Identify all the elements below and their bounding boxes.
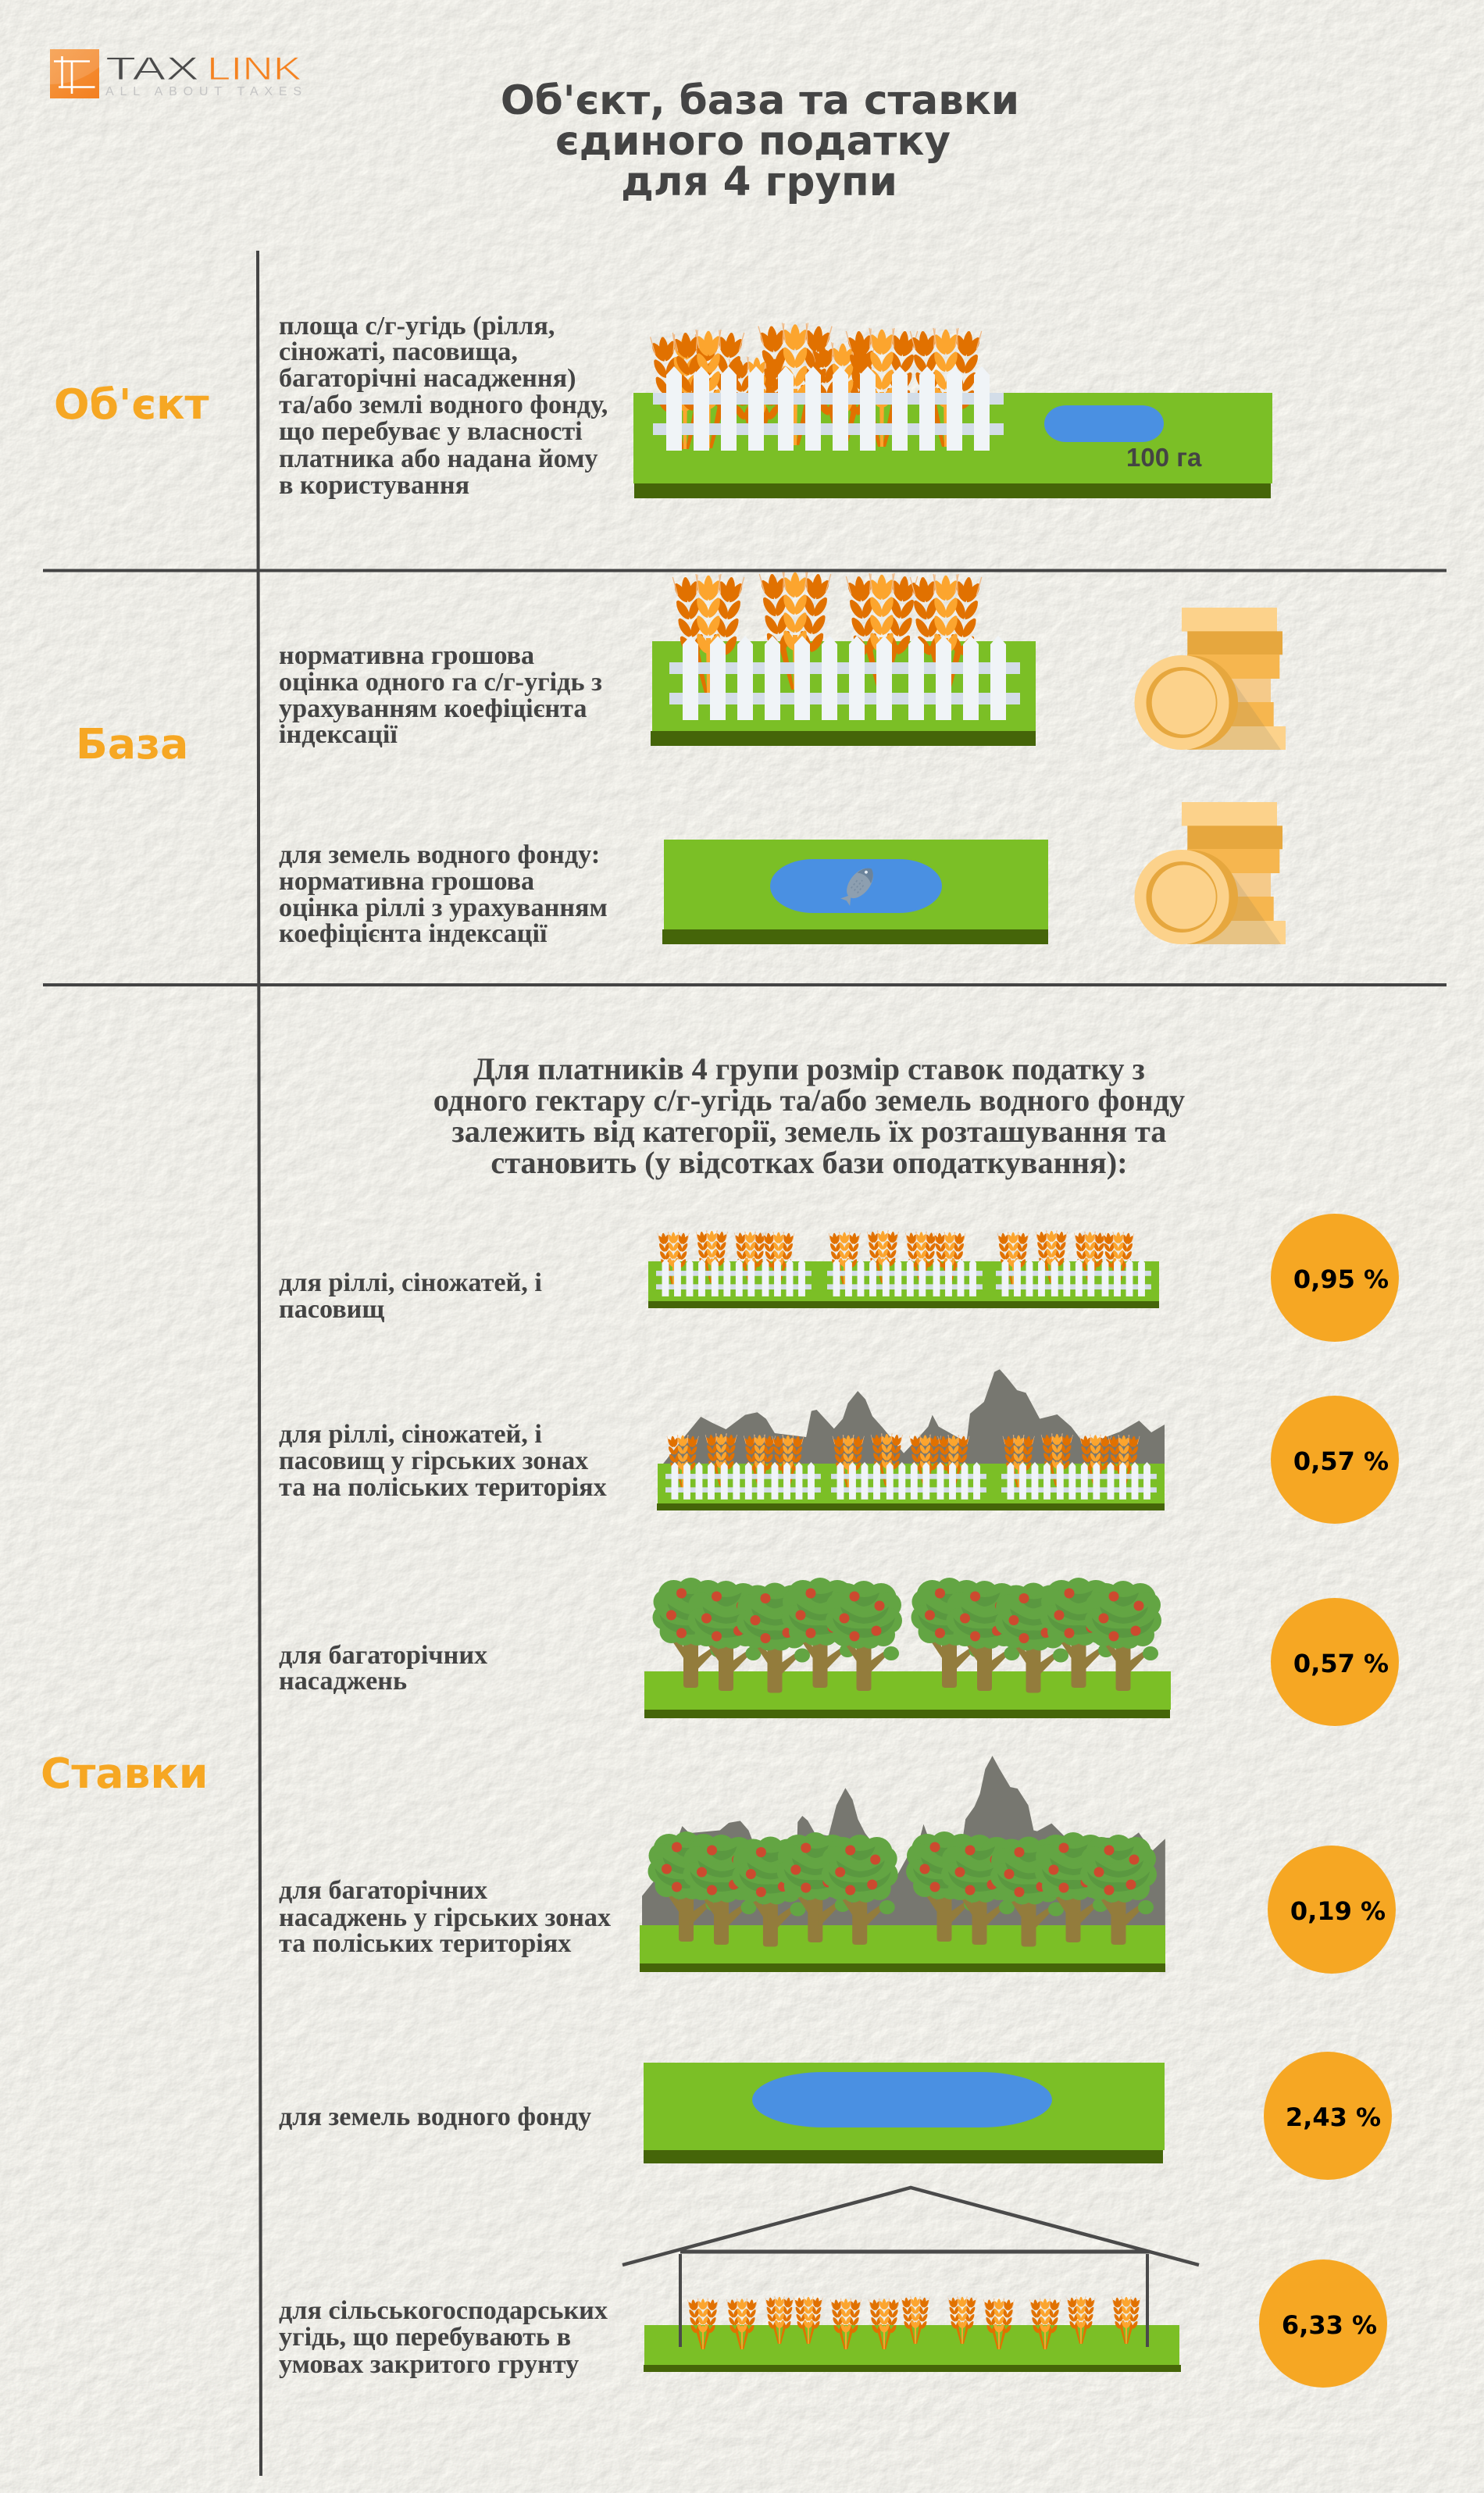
text: base description: індексації — [279, 720, 398, 749]
text: object description: в користування — [279, 471, 469, 500]
illustration: apple orchard — [644, 1578, 1171, 1718]
illustration: fenced wheat field — [651, 571, 1036, 746]
text: water fund base description: нормативна грошова — [279, 867, 534, 896]
rate badge 0,19 %: 0,19 % — [1290, 1896, 1386, 1926]
text: water fund base description: для земель водного фонду: — [279, 840, 600, 869]
illustration: greenhouse with crops — [622, 2188, 1199, 2372]
title: для 4 групи — [621, 159, 897, 205]
rate badge 6,33 %: 6,33 % — [1282, 2310, 1377, 2340]
heading: База: База — [76, 719, 188, 769]
text: object description: багаторічні насадження) — [279, 364, 576, 393]
heading: Ставки: Ставки — [41, 1749, 208, 1798]
illustration: water fund pond — [644, 2063, 1165, 2163]
text: arable land label: для ріллі, сіножатей, і — [279, 1268, 542, 1297]
logo: TaxLink: TAX — [105, 50, 199, 87]
text: rates intro: Для платників 4 групи розмір ставок податку з — [473, 1051, 1145, 1086]
text: water fund base description: оцінка ріллі з урахуванням — [279, 893, 608, 922]
text: perennial plantings label: для багаторічних — [279, 1641, 487, 1670]
logo: TaxLink — [50, 49, 301, 98]
text: base description: урахуванням коефіцієнта — [279, 694, 587, 723]
title: єдиного податку — [555, 118, 951, 165]
icon: coin stack — [1134, 608, 1286, 750]
illustration: 100 ha field with wheat, fence and pond: 100 га — [1126, 443, 1202, 472]
text: greenhouse label: для сільськогосподарських — [279, 2296, 608, 2325]
heading: Об'єкт: Об'єкт — [54, 380, 209, 429]
text: object description: площа с/г-угідь (рілля, — [279, 312, 555, 341]
rate badge 0,95 % — [1271, 1214, 1399, 1342]
illustration: fields with mountains — [657, 1369, 1165, 1510]
text: base description: оцінка одного га с/г-угідь з — [279, 668, 602, 697]
rate badge 2,43 % — [1264, 2052, 1392, 2180]
illustration: pond with fish — [662, 840, 1048, 944]
rate badge 0,57 % — [1271, 1598, 1399, 1726]
text: water fund label: для земель водного фонду — [279, 2102, 591, 2131]
title: Об'єкт, база та ставки — [501, 77, 1019, 124]
text: rates intro: залежить від категорії, земель їх розташування та — [452, 1114, 1166, 1149]
title — [501, 77, 1019, 205]
rate badge 0,57 % — [1271, 1396, 1399, 1524]
text: base description: нормативна грошова — [279, 641, 534, 670]
text: rates intro: одного гектару с/г-угідь та/або земель водного фонду — [433, 1082, 1185, 1118]
illustration: orchard with mountains — [640, 1756, 1165, 1972]
rate badge 2,43 %: 2,43 % — [1286, 2102, 1381, 2132]
logo: TaxLink: LINK — [207, 50, 301, 87]
text: perennial plantings label: насаджень — [279, 1667, 407, 1696]
text: object description: платника або надана йому — [279, 444, 598, 473]
logo: TaxLink: ALL ABOUT TAXES — [105, 85, 301, 98]
text: mountain plantings label: для багаторічних — [279, 1876, 487, 1905]
text: arable land label: пасовищ — [279, 1295, 384, 1324]
text: object description: та/або землі водного фонду, — [279, 391, 608, 419]
text: greenhouse label: умовах закритого грунту — [279, 2350, 579, 2379]
rate badge 0,95 %: 0,95 % — [1293, 1264, 1389, 1294]
text: mountain plantings label: та поліських територіях — [279, 1929, 571, 1958]
rate badge 6,33 % — [1259, 2259, 1387, 2388]
rate badge 0,57 %: 0,57 % — [1293, 1446, 1389, 1476]
rate badge 0,19 % — [1268, 1846, 1396, 1974]
text: object description: що перебуває у власності — [279, 417, 583, 446]
text: greenhouse label: угідь, що перебувають в — [279, 2323, 571, 2352]
text: object description: сіножаті, пасовища, — [279, 337, 518, 366]
text: mountain arable label: пасовищ у гірських зонах — [279, 1446, 588, 1475]
text: water fund base description: коефіцієнта індексації — [279, 919, 548, 948]
text: mountain arable label: для ріллі, сіножатей, і — [279, 1420, 542, 1449]
text: mountain arable label: та на поліських територіях — [279, 1473, 607, 1502]
rate badge 0,57 %: 0,57 % — [1293, 1649, 1389, 1678]
illustration: three fenced fields — [648, 1230, 1159, 1308]
text: mountain plantings label: насаджень у гірських зонах — [279, 1903, 611, 1932]
icon: coin stack — [1134, 802, 1286, 944]
text: rates intro: становить (у відсотках бази оподаткування): — [491, 1145, 1128, 1180]
illustration: 100 ha field with wheat, fence and pond — [633, 323, 1272, 498]
